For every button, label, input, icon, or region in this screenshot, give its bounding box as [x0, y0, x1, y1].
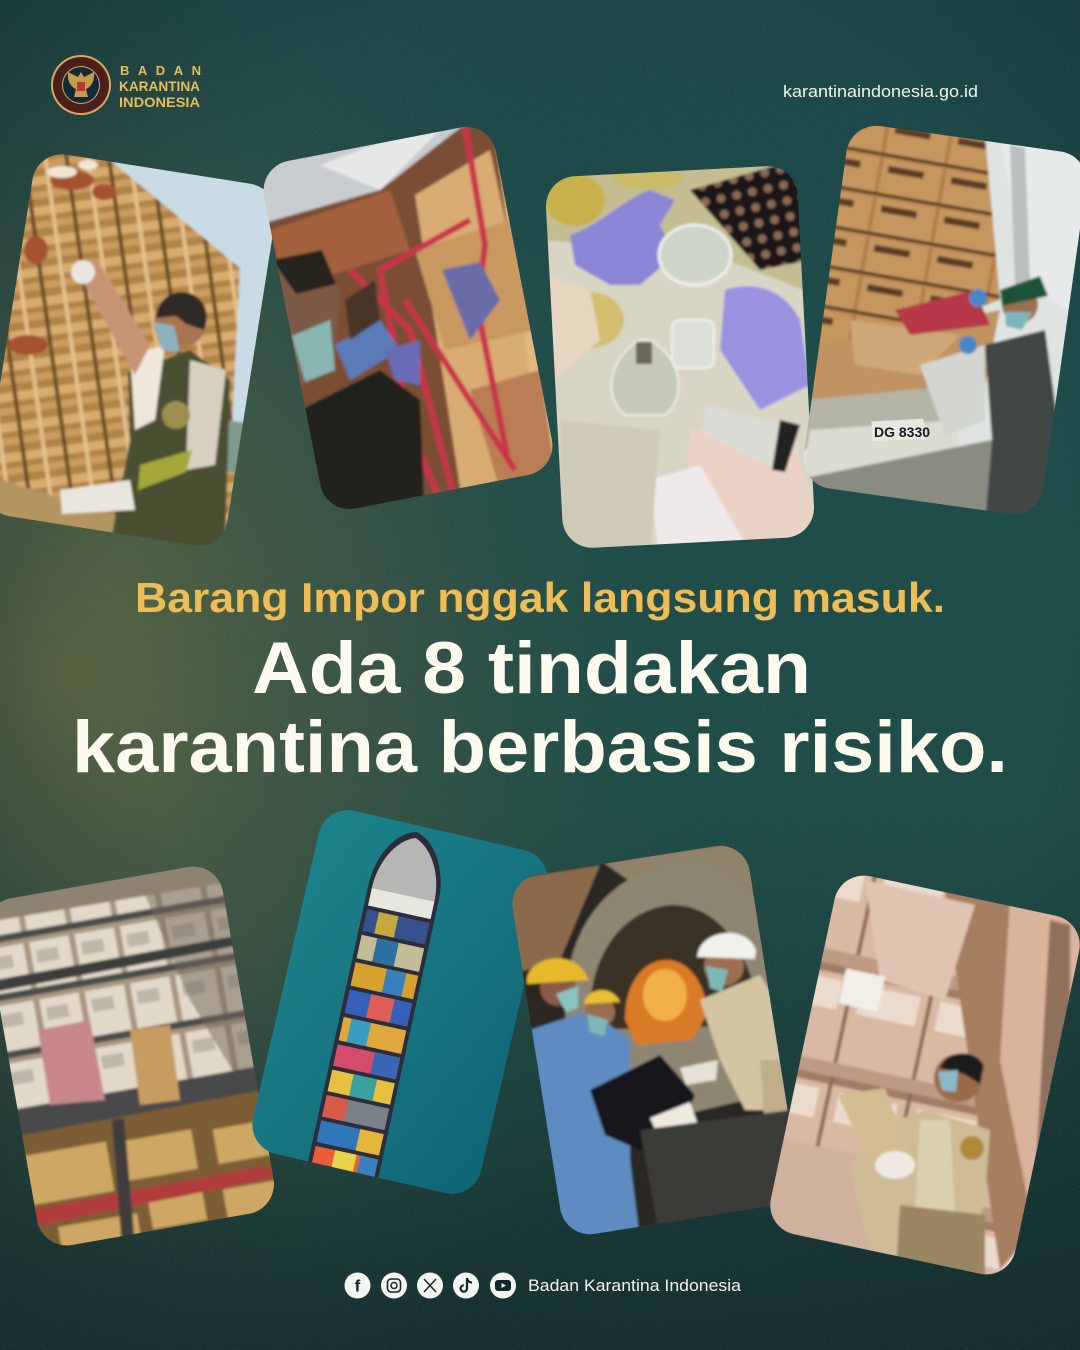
logo: Badan Karantina Indonesia — [51, 55, 201, 115]
photo: officers at incinerator — [512, 846, 788, 1234]
headline: Ada 8 tindakan karantina berbasis risiko: Ada 8 tindakan — [252, 628, 811, 709]
logo wordmark: INDONESIA — [119, 94, 200, 110]
photo: warehouse shelves — [0, 866, 274, 1246]
headline: Ada 8 tindakan karantina berbasis risiko — [72, 628, 1008, 788]
photo: officer checking wrapped pallets — [770, 876, 1080, 1274]
icon: x — [417, 1272, 443, 1298]
logo wordmark: KARANTINA — [119, 78, 200, 94]
logo wordmark — [119, 63, 201, 110]
photo: officer inspecting chicken crates — [0, 154, 272, 546]
logo emblem — [51, 55, 111, 115]
icon: facebook: f — [355, 1276, 361, 1296]
photo: lab technician with petri dish — [546, 166, 814, 548]
icon: youtube — [490, 1272, 516, 1298]
truck plate: DG 8330 — [874, 424, 930, 440]
social icons — [344, 1272, 516, 1298]
icon: instagram — [381, 1272, 407, 1298]
icon: tiktok — [453, 1272, 479, 1298]
photo: officer checking wooden crate with red straps — [264, 126, 552, 510]
ship — [308, 832, 441, 1178]
icon: facebook — [344, 1272, 370, 1298]
photo: aerial container ship at sea — [252, 810, 547, 1194]
logo wordmark: BADAN — [120, 63, 201, 78]
truck plate — [872, 419, 930, 441]
headline: Ada 8 tindakan karantina berbasis risiko: karantina berbasis risiko. — [72, 707, 1008, 788]
website url: karantinaindonesia.go.id — [783, 83, 978, 101]
headline: Barang Impor nggak langsung masuk: Barang Impor nggak langsung masuk. — [135, 574, 945, 621]
photo: officer inspecting boxes on truck — [804, 126, 1080, 514]
footer account name: Badan Karantina Indonesia — [528, 1277, 742, 1295]
